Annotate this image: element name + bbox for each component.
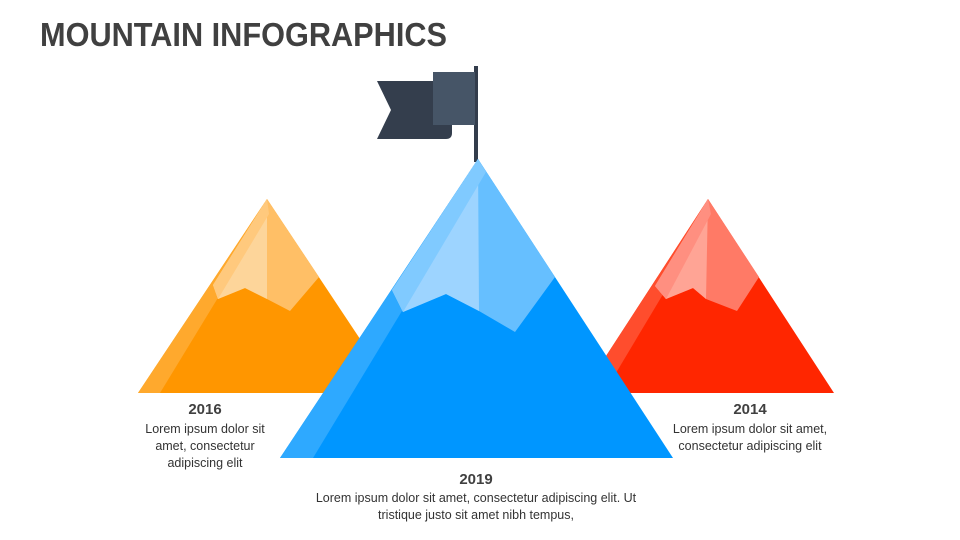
text block: 2014: 2014: [733, 401, 767, 418]
mountain: 2016 orange: [138, 199, 396, 393]
text block: 2014: consectetur adipiscing elit: [678, 439, 822, 453]
text block: 2016: amet, consectetur: [155, 439, 255, 453]
text block: 2014: Lorem ipsum dolor sit amet,: [673, 422, 827, 436]
mountain: 2014 red: [582, 199, 834, 393]
text block: 2014: [673, 401, 827, 453]
text block: 2019: Lorem ipsum dolor sit amet, consectetur adipiscing elit. Ut: [316, 491, 637, 505]
text block: 2016: Lorem ipsum dolor sit: [145, 422, 265, 436]
text block: 2019: 2019: [459, 471, 493, 488]
text block: 2016: [145, 401, 265, 470]
icon: flag: [377, 66, 478, 162]
text block: 2016: adipiscing elit: [167, 456, 243, 470]
text block: 2016: 2016: [188, 401, 222, 418]
title: MOUNTAIN INFOGRAPHICS: [40, 16, 447, 53]
text block: 2019: [316, 471, 637, 522]
text block: 2019: tristique justo sit amet nibh tempus,: [378, 508, 574, 522]
mountain: 2019 blue: [280, 159, 673, 458]
